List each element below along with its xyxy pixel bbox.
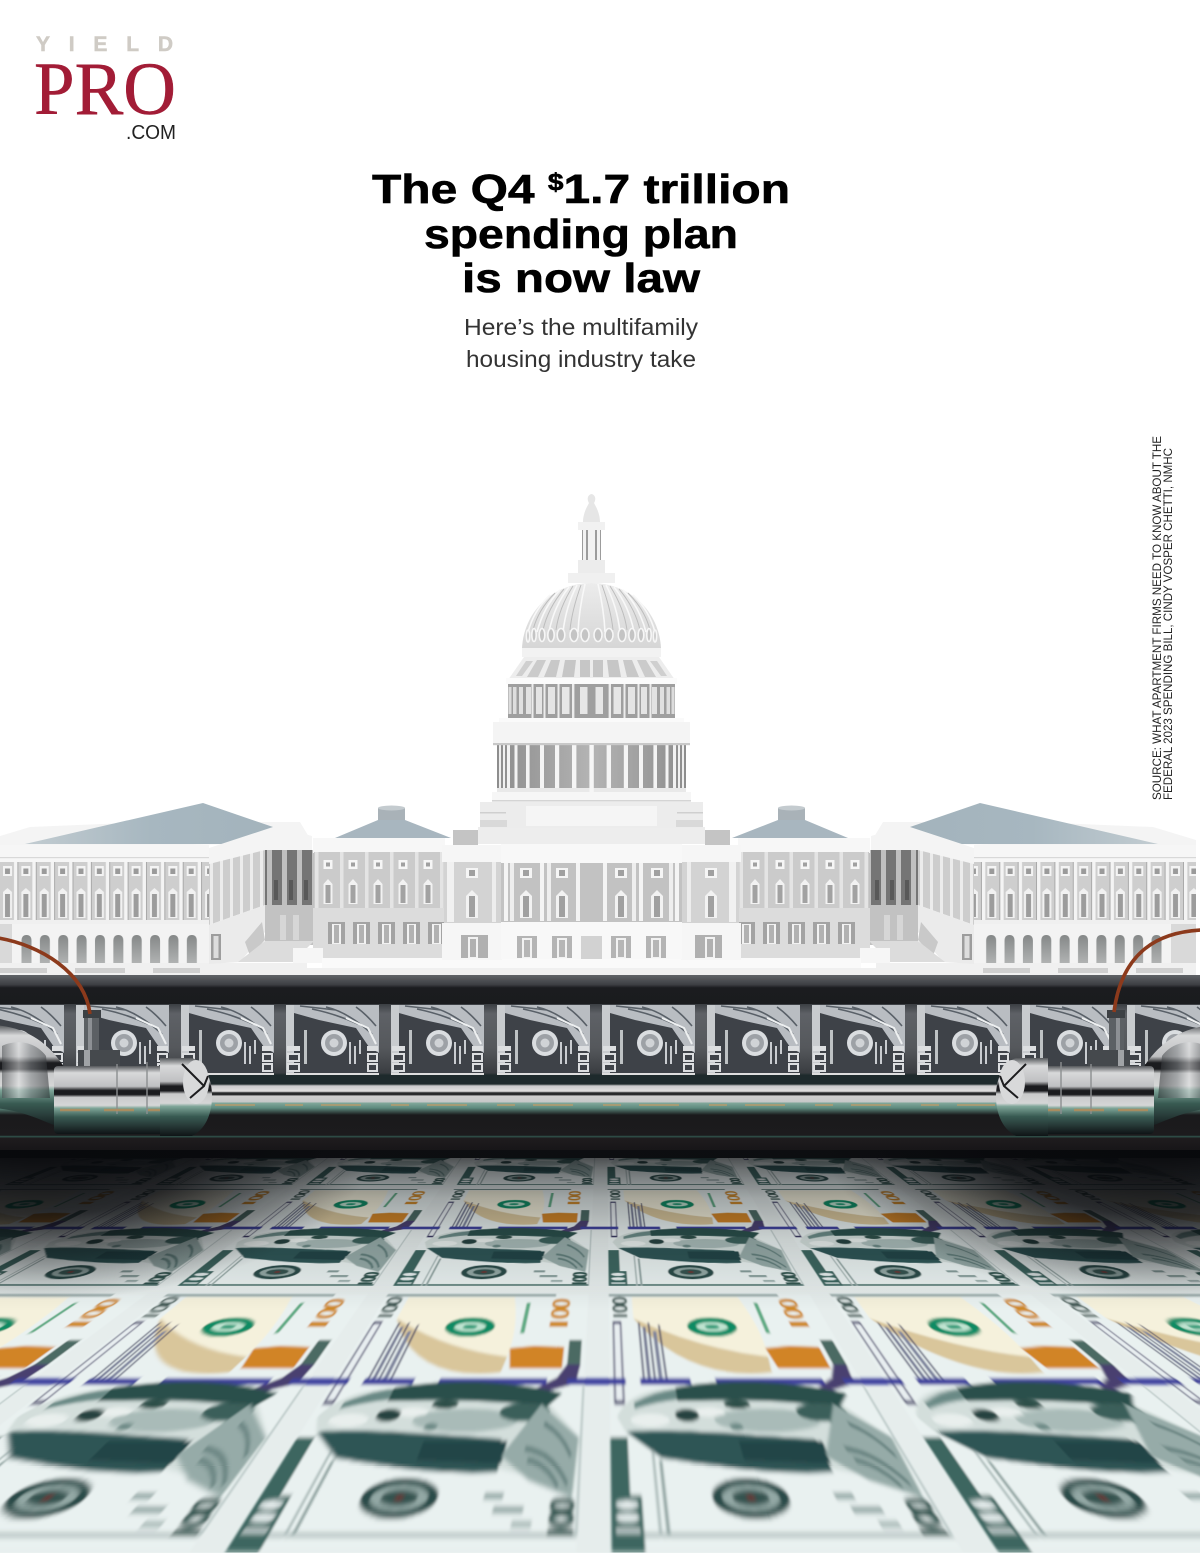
- right red wire: [1114, 930, 1200, 1012]
- upper peristyle: [508, 684, 592, 718]
- dome shell: [522, 583, 592, 648]
- source note: SOURCE: WHAT APARTMENT FIRMS NEED TO KNOW ABOUT THE: [1150, 436, 1164, 800]
- cornice: [493, 718, 592, 745]
- source note: FEDERAL 2023 SPENDING BILL, CINDY VOSPER CHETTI, NMHC: [1161, 448, 1175, 800]
- subtitle: [464, 314, 698, 372]
- logo: YIELD: [36, 33, 173, 56]
- logo: .COM: [126, 122, 176, 144]
- link block: [293, 806, 592, 975]
- left wing roof: [0, 803, 312, 850]
- right pipe fitting: [996, 1010, 1200, 1136]
- money sheet: uncut sheet of hundred dollar bills in perspective: [0, 1140, 1200, 1553]
- title: $: [548, 169, 564, 196]
- elbow: [0, 1025, 66, 1130]
- subtitle: Here’s the multifamily: [464, 314, 698, 340]
- title: is now law: [462, 255, 700, 301]
- chrome bar and reflection: [0, 1084, 1200, 1158]
- capitol building: [0, 494, 1196, 975]
- central block wing: [442, 842, 592, 960]
- source note: [1150, 436, 1175, 800]
- left red wire: [0, 938, 90, 1014]
- title: [372, 166, 790, 301]
- left wing side and courtyard: [209, 826, 315, 964]
- money roller: [0, 1004, 1200, 1084]
- pipe body: [54, 1066, 166, 1134]
- flange: [160, 1058, 212, 1136]
- left wing facade: [0, 845, 307, 975]
- roller and press machinery: [0, 975, 1200, 1084]
- dome base: [478, 792, 592, 844]
- lower colonnade: [497, 745, 592, 792]
- money sheet shading: [0, 1150, 1200, 1553]
- lantern half: [568, 522, 592, 583]
- drum: [506, 647, 592, 684]
- title: spending plan: [424, 211, 738, 257]
- fitting stem: [78, 1010, 120, 1070]
- left pipe fitting: [0, 1010, 212, 1136]
- statue of freedom: [583, 494, 600, 522]
- title: 1.7 trillion: [564, 166, 790, 212]
- logo: PRO: [34, 48, 176, 131]
- title: The Q4: [372, 166, 511, 212]
- subtitle: housing industry take: [466, 346, 696, 372]
